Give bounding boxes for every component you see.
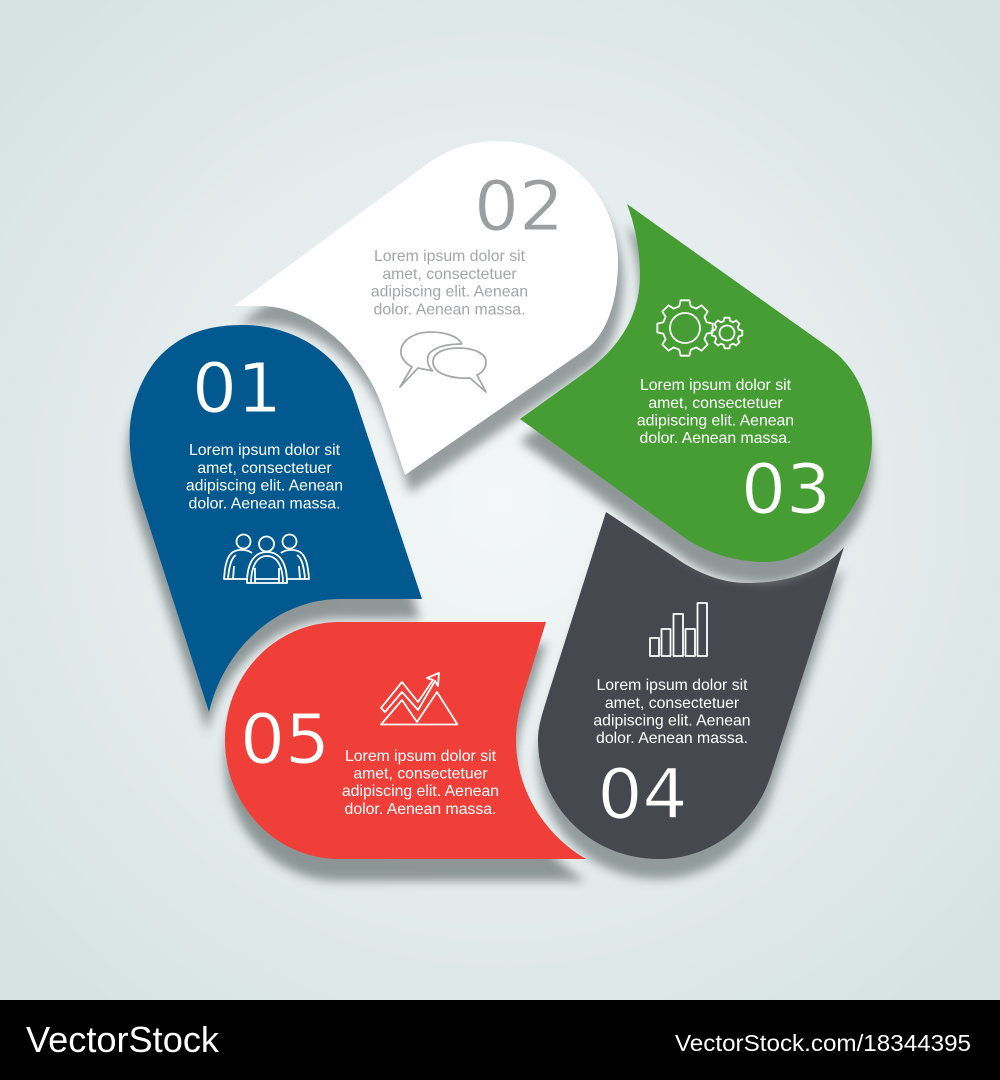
footer bar	[0, 1000, 1000, 1080]
icon: speech bubbles	[400, 332, 486, 392]
footer logo: VectorStock	[26, 1019, 220, 1060]
text: 01 body: Lorem ipsum dolor sit	[189, 442, 341, 459]
footer url: VectorStock.com/18344395	[675, 1030, 971, 1056]
text: 04 body: dolor. Aenean massa.	[596, 730, 748, 747]
icon: gears	[657, 300, 742, 356]
panel: 01 blue	[128, 325, 422, 732]
icon: people	[224, 534, 309, 583]
text: 05 body: adipiscing elit. Aenean	[342, 783, 499, 800]
text: 05 body: Lorem ipsum dolor sit	[345, 748, 497, 765]
text: 05 body: dolor. Aenean massa.	[345, 801, 496, 818]
panel: 03 green	[520, 204, 872, 584]
text: 01 body: amet, consectetuer	[197, 460, 332, 477]
text: 02 body: amet, consectetuer	[382, 266, 517, 283]
text: 04 body: Lorem ipsum dolor sit	[596, 677, 748, 694]
number 03: 03	[741, 450, 831, 530]
number 05: 05	[240, 700, 330, 780]
text: 02 body: adipiscing elit. Aenean	[371, 284, 528, 300]
number 04: 04	[598, 755, 688, 835]
text: 04 body: amet, consectetuer	[605, 695, 739, 712]
icon: bar chart	[650, 603, 707, 656]
text: 01 body: adipiscing elit. Aenean	[186, 478, 343, 494]
text: 01 body: dolor. Aenean massa.	[189, 496, 340, 512]
icon: mountain chart	[381, 673, 458, 724]
text: 03 body: Lorem ipsum dolor sit	[640, 377, 792, 394]
number 02: 02	[474, 167, 564, 247]
text: 02 body: dolor. Aenean massa.	[374, 302, 525, 318]
panel: 05 red	[225, 622, 586, 881]
text: 03 body: adipiscing elit. Aenean	[637, 412, 794, 430]
panel: 04 grey	[538, 512, 844, 879]
text: 02 body: Lorem ipsum dolor sit	[374, 248, 526, 265]
text: 03 body: amet, consectetuer	[648, 395, 783, 412]
number 01: 01	[192, 349, 282, 429]
text: 04 body: adipiscing elit. Aenean	[593, 712, 751, 730]
panel: 02 white	[234, 141, 623, 493]
text: 03 body: dolor. Aenean massa.	[640, 430, 791, 447]
text: 05 body: amet, consectetuer	[353, 766, 488, 782]
